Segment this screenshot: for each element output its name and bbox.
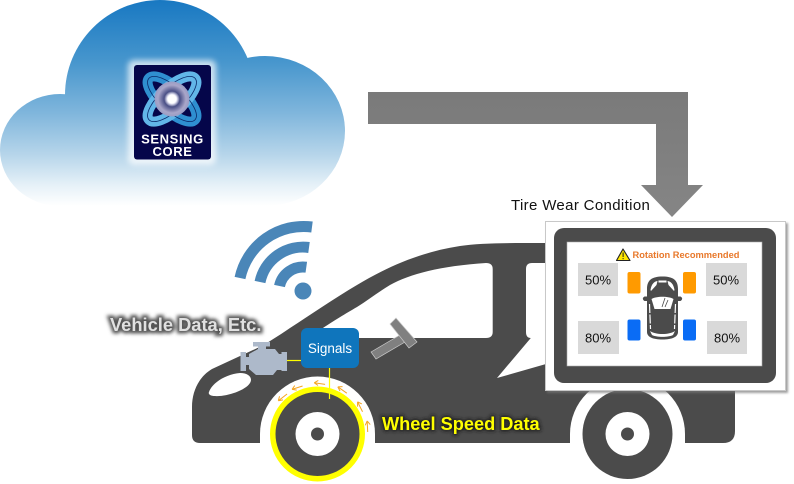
label: wheel speed data: Wheel Speed Data — [382, 414, 541, 434]
tire indicators — [628, 272, 696, 340]
icon: wifi signal — [240, 226, 312, 300]
icon: hammer — [371, 318, 417, 359]
warning icon — [616, 249, 630, 260]
headlight — [209, 373, 251, 396]
label: vehicle data: Vehicle Data, Etc. — [110, 314, 261, 335]
tire percentages: 50% — [713, 272, 739, 288]
arrow: cloud to display — [368, 92, 703, 217]
front wheel with yellow ring — [273, 389, 362, 479]
front window — [320, 263, 493, 338]
front wheel arch — [260, 376, 375, 443]
tire percentages: 80% — [714, 330, 740, 346]
icon: engine — [240, 342, 287, 375]
signals box — [301, 328, 359, 368]
tire percentages — [578, 263, 747, 354]
rear wheel arch — [570, 376, 685, 443]
signals box: Signals — [308, 341, 352, 356]
label: vehicle data: Vehicle Data, Etc. — [110, 314, 261, 335]
logo: Sensing Core: SENSING — [141, 132, 204, 146]
cloud — [0, 0, 345, 206]
rotation arrows around front wheel — [277, 380, 371, 432]
panel: tire wear display — [546, 222, 788, 393]
car silhouette — [192, 243, 735, 443]
icon: car top view — [643, 276, 682, 340]
tire percentages: 50% — [585, 272, 611, 288]
logo: Sensing Core: CORE — [153, 144, 192, 159]
rear window and callout tail — [497, 263, 560, 378]
label: wheel speed data: Wheel Speed Data — [382, 414, 541, 434]
rear wheel — [582, 389, 672, 479]
connector lines — [287, 360, 330, 399]
tire percentages: 80% — [585, 330, 611, 346]
alert text: Rotation Recommended — [632, 250, 740, 260]
logo: Sensing Core — [128, 60, 216, 165]
label: tire wear condition: Tire Wear Condition — [511, 197, 650, 214]
